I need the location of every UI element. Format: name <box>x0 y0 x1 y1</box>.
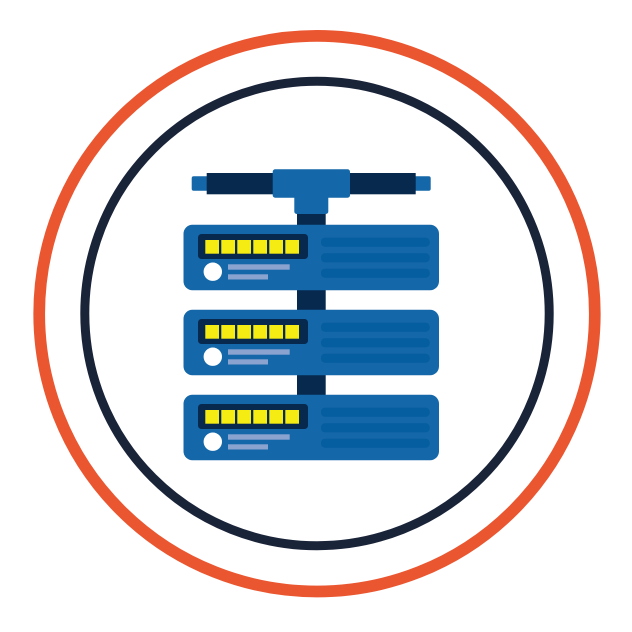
server unit 3 <box>184 395 439 460</box>
server unit 2 <box>184 310 439 375</box>
inner navy ring <box>85 81 549 546</box>
dark pipe section <box>207 173 416 194</box>
pipe end cap: right <box>413 176 431 191</box>
central vertical column <box>297 210 326 400</box>
T connector <box>273 169 350 214</box>
server unit 1 <box>184 225 439 290</box>
pipe end cap: left <box>192 176 210 191</box>
outer orange ring <box>39 36 595 592</box>
horizontal top pipe <box>192 173 431 194</box>
